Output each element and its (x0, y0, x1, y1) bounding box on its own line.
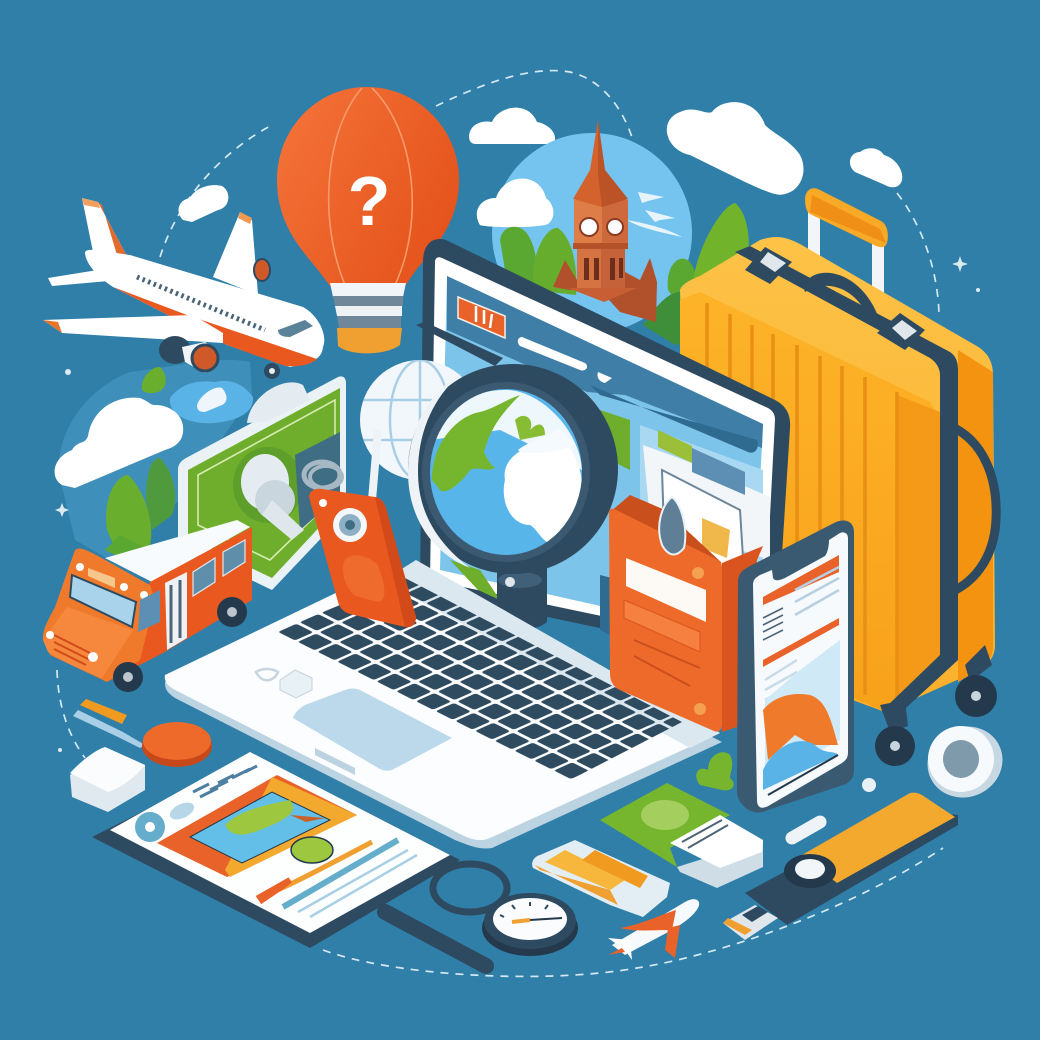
search bar (518, 337, 587, 370)
small plant and dots (142, 367, 876, 792)
small toy plane (608, 899, 699, 960)
white eraser box (70, 747, 145, 812)
laptop base (165, 560, 722, 849)
trees (500, 203, 749, 345)
left leaves (105, 458, 175, 560)
engine (159, 336, 191, 364)
wireframe globe (360, 322, 503, 480)
strap (735, 246, 958, 718)
green card stack (600, 783, 763, 888)
front face (680, 292, 940, 712)
question mark: ? (348, 162, 390, 240)
fuselage (85, 250, 324, 367)
magnifying glass (408, 364, 618, 630)
side handle (946, 425, 996, 594)
airplane (43, 198, 324, 379)
trackpad (293, 688, 452, 771)
tube bundle (532, 840, 670, 917)
compass gauge (482, 893, 578, 956)
orange phone with keyring (309, 430, 416, 627)
clock tower (553, 120, 657, 322)
telescopic handle (814, 210, 878, 300)
tail fin (82, 198, 128, 265)
document stack (643, 430, 770, 590)
laptop screen (420, 239, 790, 665)
banknote (178, 376, 346, 590)
smartphone (737, 520, 854, 812)
small white cubes (280, 670, 312, 698)
sparkles (55, 256, 980, 752)
orange wallet (609, 495, 763, 732)
orange tag (458, 297, 505, 338)
gear (264, 363, 280, 379)
suitcase (680, 188, 997, 766)
wheels (880, 700, 908, 732)
birds (627, 192, 682, 237)
magnifier on desk (385, 864, 507, 966)
cabin windows (137, 277, 265, 330)
carry handle (803, 273, 878, 316)
sky globe (477, 133, 749, 345)
light bulb balloon (277, 87, 459, 353)
paper clip (659, 497, 685, 554)
tailplane (48, 268, 120, 286)
hill behind left clouds (58, 360, 253, 560)
clouds (55, 102, 902, 488)
small white capsule (792, 822, 820, 838)
near wing (43, 315, 223, 343)
body (680, 237, 995, 712)
white ring tape (916, 714, 1014, 810)
bus (43, 520, 252, 692)
dashed flight paths (57, 71, 943, 976)
tablet with map (92, 752, 460, 948)
far wing and engine (213, 212, 258, 295)
usb stick (723, 793, 958, 940)
keyboard (275, 578, 682, 780)
hinge band (400, 560, 720, 748)
content blocks (600, 410, 630, 470)
paint brush and knob (73, 699, 212, 767)
buckles (745, 247, 792, 284)
